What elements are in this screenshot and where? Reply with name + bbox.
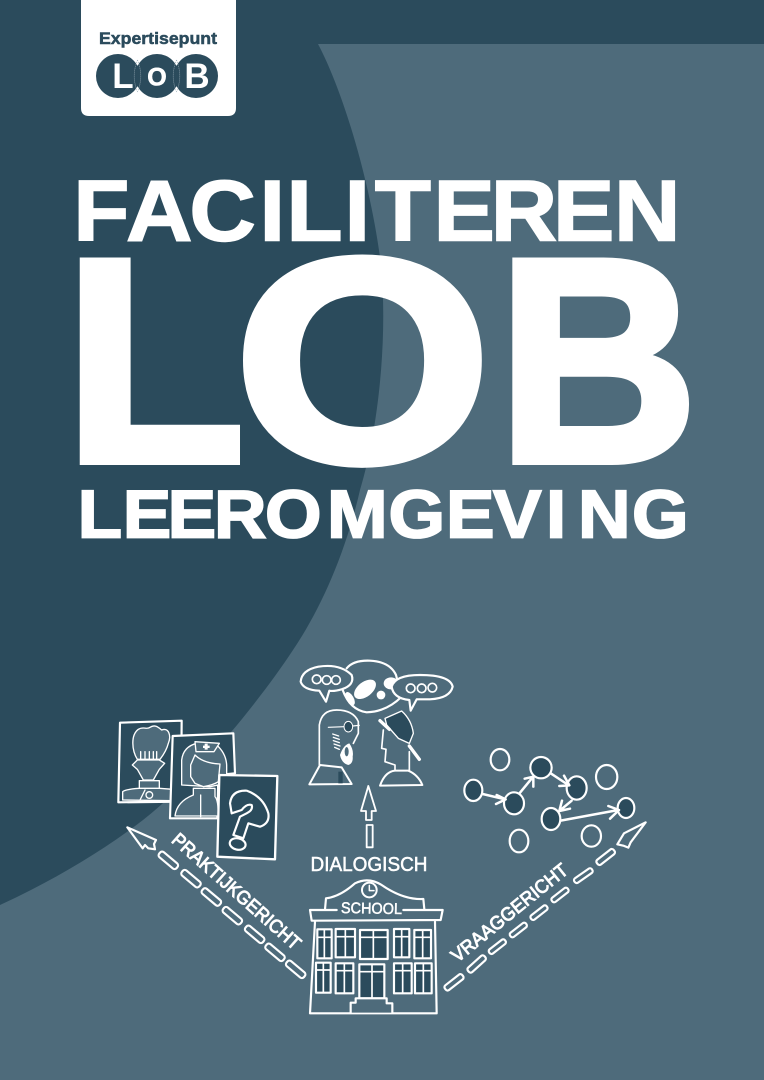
arrows between nodes	[483, 773, 619, 821]
card: chef	[118, 721, 182, 802]
title: LOB	[64, 198, 698, 523]
walls	[310, 922, 437, 1013]
pediment	[325, 880, 424, 909]
label: DIALOGISCH: DIALOGISCH	[310, 854, 428, 876]
window mullions	[316, 929, 432, 998]
clock	[362, 883, 377, 897]
logo: Expertisepunt LOB: O	[147, 64, 167, 92]
empty nodes	[491, 749, 617, 852]
label: VRAAGGERICHT: VRAAGGERICHT	[447, 860, 573, 967]
speech bubble right	[392, 675, 453, 711]
label: PRAKTIJKGERICHT: PRAKTIJKGERICHT	[167, 830, 305, 955]
card: question mark	[217, 775, 277, 859]
logo: Expertisepunt LOB: Expertisepunt	[99, 30, 218, 48]
arrow: vraaggericht path	[443, 822, 646, 991]
illustration: school building	[310, 880, 443, 1013]
filled nodes	[464, 757, 634, 830]
title: LOB: O	[234, 198, 491, 523]
title: FACILITEREN: FACILITEREN	[73, 162, 680, 259]
label: SCHOOL: SCHOOL	[341, 900, 402, 918]
cornice	[310, 910, 443, 921]
arrow: praktijkgericht path	[127, 827, 306, 979]
steps	[351, 998, 392, 1013]
title: LOB: L	[64, 200, 245, 523]
logo: Expertisepunt LOB	[81, 0, 236, 116]
logo: Expertisepunt LOB: B	[184, 57, 210, 96]
windows	[316, 929, 432, 998]
card: nurse	[170, 733, 235, 818]
speech bubble left	[301, 666, 352, 702]
person right with cap	[380, 711, 422, 786]
person left with beard	[309, 710, 359, 784]
illustration: portrait cards	[118, 721, 277, 859]
big thought bubble with footprints	[343, 661, 402, 712]
title: LOB: B	[498, 199, 698, 523]
arrow up	[361, 786, 376, 847]
illustration: two people in dialogue	[301, 661, 453, 847]
title: LEEROMGEVING: LEEROMGEVING	[78, 476, 689, 552]
illustration: connected question nodes	[464, 749, 634, 852]
logo: Expertisepunt LOB: L	[112, 57, 134, 96]
